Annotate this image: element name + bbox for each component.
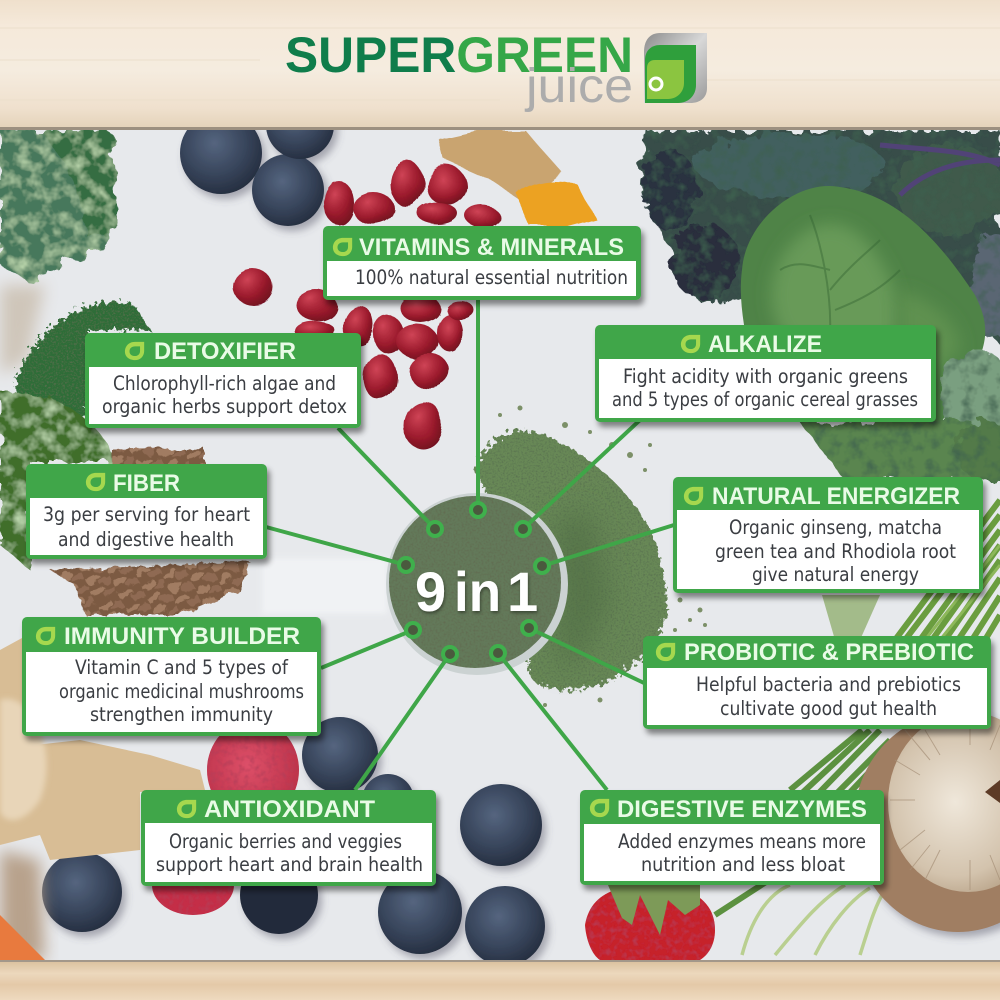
text: immunity builder: Vitamin C and 5 types of [75,656,289,679]
powder specks [498,406,707,707]
heading: vitamins and minerals: VITAMINS & MINERALS [359,234,624,261]
heading: antioxidant: ANTIOXIDANT [204,796,375,823]
logo icon [644,33,707,103]
panel: probiotic and prebiotic [643,636,991,729]
footer band: wood [0,962,1000,1000]
icon: leaf [684,487,703,505]
text: probiotic and prebiotic [696,673,961,720]
wood grain lines [0,28,1000,100]
panel: alkalize [595,325,936,422]
text: natural energizer [715,516,956,586]
heading: fiber: FIBER [113,470,180,497]
text: antioxidant [156,830,423,876]
powder pile shadow [555,510,610,670]
heading: natural energizer: NATURAL ENERGIZER [712,483,960,510]
icon: leaf [333,238,352,256]
icon: leaf [681,335,700,353]
heading: detoxifier: DETOXIFIER [154,338,296,365]
broccoli [800,351,1000,480]
text: detoxifier [102,372,347,418]
text: fiber: 3g per serving for heart [43,503,250,526]
text: natural energizer: give natural energy [752,563,919,586]
text: probiotic and prebiotic: cultivate good gut health [720,697,937,720]
green powder pile [475,431,667,690]
center label: 9 in 1: 9 [415,560,446,623]
heading: immunity builder: IMMUNITY BUILDER [64,623,300,650]
icon: leaf [125,342,144,360]
measuring scoop [262,558,387,614]
center label: 9 in 1: 1 [507,560,538,623]
panel: natural energizer [673,477,983,593]
ginger [0,638,205,960]
blueberries [42,91,545,966]
text: immunity builder [59,656,304,726]
text: antioxidant: support heart and brain health [156,853,423,876]
text: antioxidant: Organic berries and veggies [169,830,402,853]
logo subword: juice: juice [524,60,633,113]
spirulina, left [14,302,150,430]
logo wordmark: SUPERGREEN [285,27,633,83]
heading: probiotic and prebiotic: PROBIOTIC & PREBIOTIC [684,639,974,666]
dark kale, top right [640,130,1000,345]
center label: 9 in 1 [415,560,538,623]
kale, top left [0,130,118,285]
text: digestive enzymes: nutrition and less bloat [641,853,845,876]
strawberry [585,885,715,960]
turmeric [440,130,595,226]
icon: leaf [36,627,55,645]
shadow under header band [0,127,1000,130]
shiitake mushroom [854,712,1000,932]
connector nodes [399,503,549,661]
text: detoxifier: organic herbs support detox [102,395,347,418]
text: alkalize: Fight acidity with organic greens [623,365,908,388]
wheatgrass, lower [715,730,895,915]
background: tan wood strip at left [0,285,45,375]
text: alkalize: and 5 types of organic cereal grasses [612,388,918,411]
pale stalk behind panels [822,595,880,640]
text: digestive enzymes [618,830,866,876]
icon: leaf [590,799,609,817]
pomegranate seeds [233,161,499,449]
leafy kale, left [0,391,118,570]
connector lines [266,298,674,790]
header band: wood [0,0,1000,128]
panel: digestive enzymes [580,790,884,885]
spinach leaf [741,186,985,440]
raspberries [152,720,299,915]
text: immunity builder: organic medicinal mushrooms [59,680,304,703]
text: alkalize [612,365,918,411]
heading: alkalize: ALKALIZE [708,331,822,358]
heading: digestive enzymes: DIGESTIVE ENZYMES [617,796,867,823]
carrot [0,915,45,960]
logo [285,27,707,113]
wheatgrass, right [895,500,1000,640]
panel: detoxifier [85,333,361,428]
text: natural energizer: green tea and Rhodiola root [715,540,956,563]
text: probiotic and prebiotic: Helpful bacteria and prebiotics [696,673,961,696]
center label: 9 in 1: in [454,560,501,623]
icon: leaf [656,643,675,661]
text: immunity builder: strengthen immunity [90,703,273,726]
text: fiber: and digestive health [58,528,234,551]
text: detoxifier: Chlorophyll-rich algae and [113,372,336,395]
panel: antioxidant [141,790,436,886]
icon: leaf [177,800,196,818]
panel: fiber [26,464,267,559]
panel: immunity builder [22,617,321,736]
icon: leaf [86,473,105,491]
flax seeds [50,448,250,615]
text: fiber [43,503,250,551]
text: digestive enzymes: Added enzymes means more [618,830,866,853]
text: vitamins and minerals: 100% natural essential nutrition [355,266,628,289]
panel: vitamins and minerals [323,226,641,300]
powder disc in glass ring [386,493,568,675]
text: natural energizer: Organic ginseng, matcha [729,516,942,539]
shadow above footer band [0,960,1000,962]
